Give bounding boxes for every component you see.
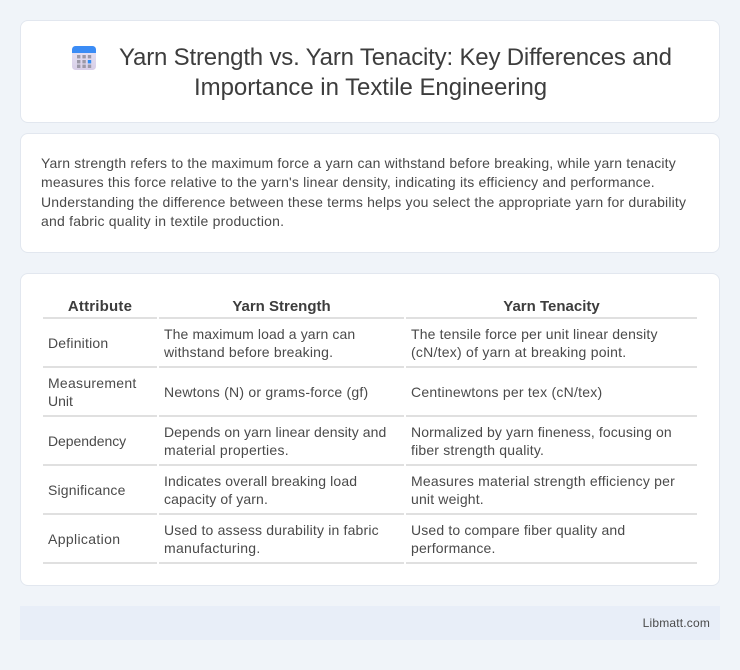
row: Significance: Measures material strength efficiency per	[411, 473, 675, 489]
row: Dependency: Depends on yarn linear density and	[164, 424, 386, 440]
heading: Importance in Textile Engineering	[194, 74, 547, 101]
row: Definition: The tensile force per unit linear density	[411, 326, 658, 342]
footer text: Libmatt.com	[643, 616, 710, 630]
row: Dependency	[48, 424, 672, 458]
row: Application: Used to assess durability in fabric	[164, 522, 379, 538]
row: Measurement Unit: Measurement	[48, 375, 137, 391]
heading	[119, 44, 672, 101]
row: Measurement Unit	[48, 375, 602, 409]
table header: Yarn Strength: Yarn Strength	[232, 298, 331, 315]
row: Dependency: fiber strength quality.	[411, 442, 544, 458]
row: Dependency: material properties.	[164, 442, 289, 458]
row: Dependency: Dependency	[48, 433, 126, 449]
row: Application: performance.	[411, 540, 496, 556]
row: Measurement Unit: Centinewtons per tex (cN/tex)	[411, 384, 602, 400]
row: Application	[48, 522, 625, 556]
intro paragraph: and fabric quality in textile production.	[41, 213, 284, 229]
row: Significance: Indicates overall breaking load	[164, 473, 357, 489]
title card	[20, 20, 720, 123]
row: Definition: (cN/tex) of yarn at breaking point.	[411, 344, 626, 360]
row: Significance	[48, 473, 675, 507]
row: Measurement Unit: Unit	[48, 393, 73, 409]
table header: Yarn Tenacity: Yarn Tenacity	[503, 298, 600, 315]
intro paragraph: measures this force relative to the yarn's linear density, indicating its efficiency and performance.	[41, 174, 655, 190]
row: Application: manufacturing.	[164, 540, 261, 556]
row: Measurement Unit: Newtons (N) or grams-force (gf)	[164, 384, 368, 400]
intro paragraph: Yarn strength refers to the maximum force a yarn can withstand before breaking, while yarn tenacity	[41, 155, 676, 171]
comparison table	[43, 298, 697, 564]
row: Application: Used to compare fiber quality and	[411, 522, 625, 538]
intro card	[20, 133, 720, 253]
row: Significance: Significance	[48, 482, 126, 498]
table header: Attribute: Attribute	[68, 298, 132, 315]
icon: calendar grid	[72, 46, 96, 70]
row: Application: Application	[48, 531, 120, 547]
footer bar	[20, 606, 720, 640]
intro paragraph	[41, 155, 686, 229]
table card	[20, 273, 720, 586]
heading: Yarn Strength vs. Yarn Tenacity: Key Differences and	[119, 44, 672, 71]
row: Definition: withstand before breaking.	[164, 344, 333, 360]
row: Dependency: Normalized by yarn fineness, focusing on	[411, 424, 672, 440]
intro paragraph: Understanding the difference between these terms helps you select the appropriate yarn for durability	[41, 194, 686, 210]
row: Definition: Definition	[48, 335, 108, 351]
row: Significance: capacity of yarn.	[164, 491, 268, 507]
row: Definition: The maximum load a yarn can	[164, 326, 355, 342]
row: Definition	[48, 326, 658, 360]
row: Significance: unit weight.	[411, 491, 484, 507]
